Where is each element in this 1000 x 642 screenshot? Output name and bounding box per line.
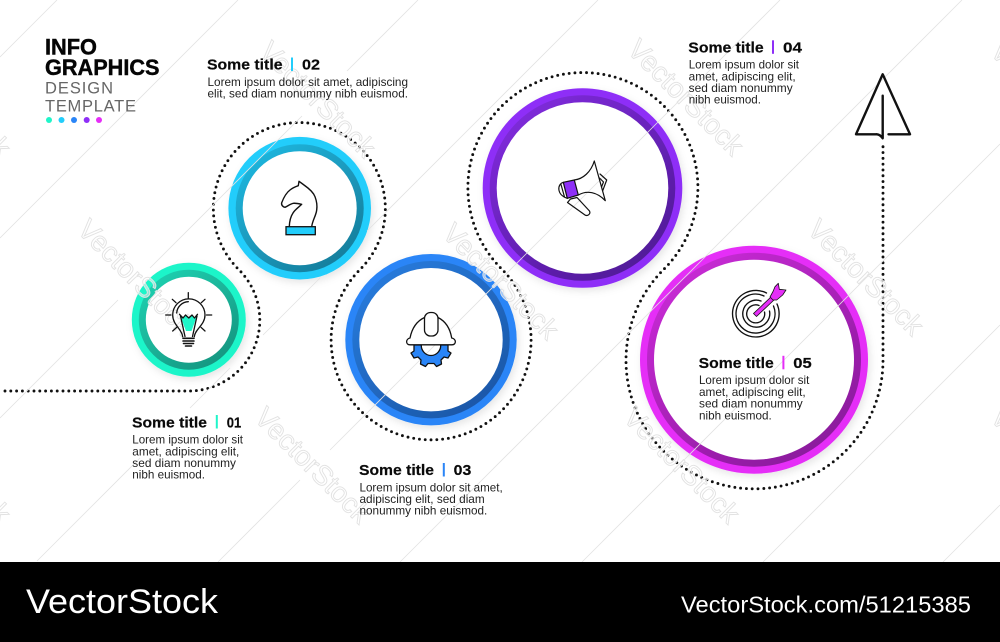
icon: megaphone [559,161,607,215]
footer bar [0,562,1000,642]
circle 5: magenta ring [640,246,868,474]
text block 02: 02 [302,56,320,73]
text block 04: amet, adipiscing elit, [689,70,796,83]
icon: light bulb [166,293,212,346]
text block 05: nibh euismod. [699,409,772,422]
text block 01: sed diam nonummy [132,457,236,470]
text block 03: nonummy nibh euismod. [360,505,487,518]
text block 03: Lorem ipsum dolor sit amet, [360,481,503,494]
text block 05: Some title [699,355,774,372]
text block 04 [688,39,803,107]
text block 04: sed diam nonummy [689,82,793,95]
heading: DESIGN [45,80,113,98]
text block 02 [207,56,408,100]
watermark text: VectorStock [802,213,930,342]
watermark text: VectorStock [622,33,750,162]
text block 01: nibh euismod. [132,469,205,482]
circle 1: teal ring [132,263,246,377]
text block 01: amet, adipiscing elit, [132,446,239,458]
watermark text: VectorStock [254,35,382,164]
text block 02: Some title [207,56,282,73]
text block 01: 01 [227,414,241,431]
text block 04: Some title [688,39,764,56]
text block 05: amet, adipiscing elit, [699,386,806,399]
watermark text: VectorStock [249,401,377,530]
text block 03: 03 [454,462,471,479]
text block 04: nibh euismod. [689,94,761,107]
text block 05: Lorem ipsum dolor sit [699,374,810,387]
heading: INFO [45,34,97,59]
text block 02: Lorem ipsum dolor sit amet, adipiscing [208,76,408,89]
icon: chess knight [282,181,317,235]
dotted path [5,73,883,489]
text block 03: adipiscing elit, sed diam [360,493,485,506]
text block 01 [132,414,244,482]
watermark text: VectorStock [437,217,565,346]
icon: helmet and gear [407,312,455,366]
text block 03: Some title [359,462,434,479]
text block 04: Lorem ipsum dolor sit [689,59,800,72]
icon: paper plane arrow [856,74,910,138]
watermark text: VectorStock [72,213,200,342]
text block 05: sed diam nonummy [699,398,803,411]
circle 4: purple ring [483,88,682,288]
text block 02: elit, sed diam nonummy nibh euismod. [208,87,408,100]
watermark text: VectorStock [618,401,746,530]
text block 05 [699,355,812,422]
text block 05: 05 [793,355,812,372]
heading colour dots [46,117,102,123]
text block 03 [359,462,503,518]
circle 3: blue ring [345,254,517,425]
heading: TEMPLATE [45,97,136,115]
circle 2: cyan ring [228,137,371,280]
heading: GRAPHICS [45,55,160,80]
icon: target with arrow [733,283,786,337]
footer logo: VectorStock [26,583,219,621]
text block 04: 04 [783,39,803,56]
watermark text [0,33,1000,530]
heading [45,34,160,115]
text block 01: Lorem ipsum dolor sit [132,434,244,447]
footer url: VectorStock.com/51215385 [681,592,971,618]
text block 01: Some title [132,414,207,431]
